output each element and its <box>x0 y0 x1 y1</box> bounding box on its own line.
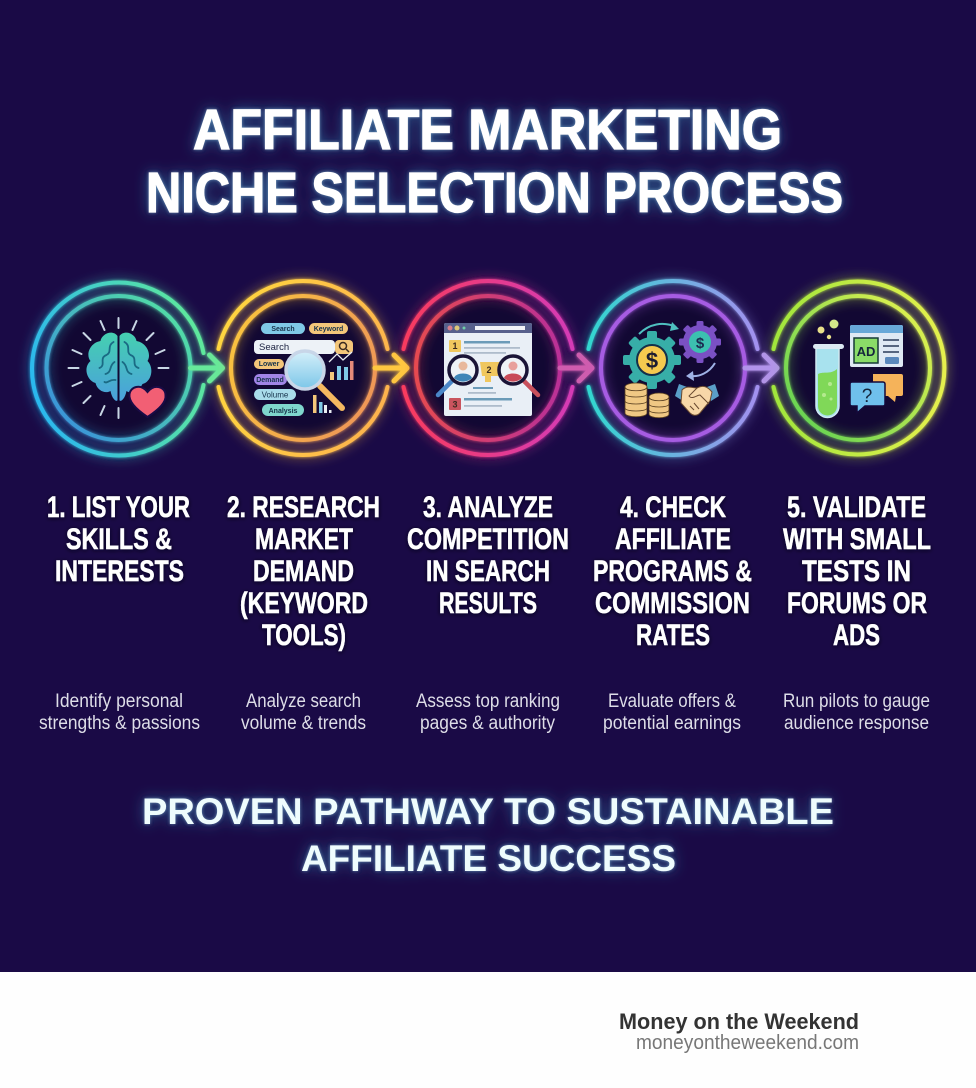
neon rings and arrow <box>588 281 777 455</box>
step 5 description <box>783 691 930 734</box>
step 1 heading: INTERESTS <box>55 555 184 588</box>
step 2 heading: MARKET <box>255 523 353 556</box>
step 3 heading: COMPETITION <box>407 523 569 556</box>
step 2 heading: DEMAND <box>253 555 354 588</box>
panel: step 2 circle with search icon <box>218 281 407 455</box>
step 5 description: Run pilots to gauge <box>783 691 930 712</box>
step 3 heading: IN SEARCH <box>426 555 550 588</box>
closing tagline: AFFILIATE SUCCESS <box>301 838 676 879</box>
step 2 description <box>241 691 366 734</box>
title <box>146 98 843 225</box>
step 1 heading: 1. LIST YOUR <box>47 491 190 524</box>
footer brand: moneyontheweekend.com <box>636 1032 859 1054</box>
icon: brain with heart <box>68 318 168 418</box>
step 5 heading: TESTS IN <box>802 555 911 588</box>
icon: search results page with magnifiers <box>438 323 538 416</box>
icon: keyword tags, search bar and magnifier <box>254 323 354 416</box>
neon rings and arrow <box>32 282 222 456</box>
step 3 description <box>416 691 560 734</box>
step 1 description: Identify personal <box>55 691 183 712</box>
step 2 heading: (KEYWORD <box>240 587 368 620</box>
neon rings and arrow <box>404 281 592 455</box>
title: AFFILIATE MARKETING <box>193 98 782 162</box>
step 4 heading: 4. CHECK <box>620 491 726 524</box>
step 2 heading: 2. RESEARCH <box>227 491 380 524</box>
step 5 description: audience response <box>784 713 929 734</box>
step 2 description: volume & trends <box>241 713 366 734</box>
step 2 heading <box>227 491 380 652</box>
closing tagline <box>142 791 834 879</box>
step 5 heading: WITH SMALL <box>783 523 931 556</box>
title: NICHE SELECTION PROCESS <box>146 161 843 225</box>
panel: step 4 circle with commission icon <box>588 281 777 455</box>
step 2 description: Analyze search <box>246 691 361 712</box>
icon: keyword tags, search bar and magnifier: Search <box>271 326 295 333</box>
step 5 heading: 5. VALIDATE <box>787 491 926 524</box>
step 4 heading: PROGRAMS & <box>593 555 752 588</box>
icon: search results page with magnifiers: 3 <box>452 400 458 410</box>
icon: keyword tags, search bar and magnifier: Search <box>259 342 289 353</box>
icon: keyword tags, search bar and magnifier: Demand <box>256 377 284 384</box>
step 1 heading <box>47 491 190 588</box>
icon: test tube, ad window and speech bubbles <box>813 320 903 418</box>
neon rings <box>774 282 944 454</box>
step 5 heading <box>783 491 931 652</box>
panel: step 5 circle with test icon <box>774 282 944 454</box>
step 3 description: Assess top ranking <box>416 691 560 712</box>
step 1 heading: SKILLS & <box>66 523 172 556</box>
step 1 description <box>39 691 200 734</box>
footer band <box>0 972 976 1088</box>
step 3 heading <box>407 491 569 620</box>
step 4 description: Evaluate offers & <box>608 691 736 712</box>
icon: gears, coins and handshake: $ <box>696 335 705 352</box>
icon: test tube, ad window and speech bubbles: AD <box>857 344 875 359</box>
step 5 heading: ADS <box>833 619 880 652</box>
step 3 description: pages & authority <box>420 713 555 734</box>
neon rings and arrow <box>218 281 407 455</box>
step 4 heading: AFFILIATE <box>615 523 731 556</box>
icon: gears, coins and handshake <box>623 321 721 418</box>
step 4 heading <box>593 491 752 652</box>
icon: keyword tags, search bar and magnifier: Keyword <box>314 326 343 333</box>
icon: search results page with magnifiers: 2 <box>486 365 492 375</box>
step 2 heading: TOOLS) <box>262 619 346 652</box>
footer brand: Money on the Weekend <box>619 1009 859 1034</box>
icon: keyword tags, search bar and magnifier: Volume <box>262 390 289 400</box>
step 3 heading: 3. ANALYZE <box>423 491 553 524</box>
step 4 heading: COMMISSION <box>595 587 750 620</box>
step 4 heading: RATES <box>636 619 710 652</box>
step 4 description: potential earnings <box>603 713 741 734</box>
footer brand <box>619 1009 859 1054</box>
panel: step 1 circle with brain icon <box>32 282 222 456</box>
panel: step 3 circle with competition icon <box>404 281 592 455</box>
step 5 heading: FORUMS OR <box>787 587 927 620</box>
icon: gears, coins and handshake: $ <box>646 348 658 373</box>
step 1 description: strengths & passions <box>39 713 200 734</box>
icon: keyword tags, search bar and magnifier: Lower <box>259 361 280 368</box>
step 4 description <box>603 691 741 734</box>
icon: keyword tags, search bar and magnifier: Analysis <box>269 408 298 415</box>
icon: test tube, ad window and speech bubbles: ? <box>862 386 872 407</box>
closing tagline: PROVEN PATHWAY TO SUSTAINABLE <box>142 791 834 832</box>
step 3 heading: RESULTS <box>439 587 537 620</box>
icon: search results page with magnifiers: 1 <box>452 341 458 351</box>
